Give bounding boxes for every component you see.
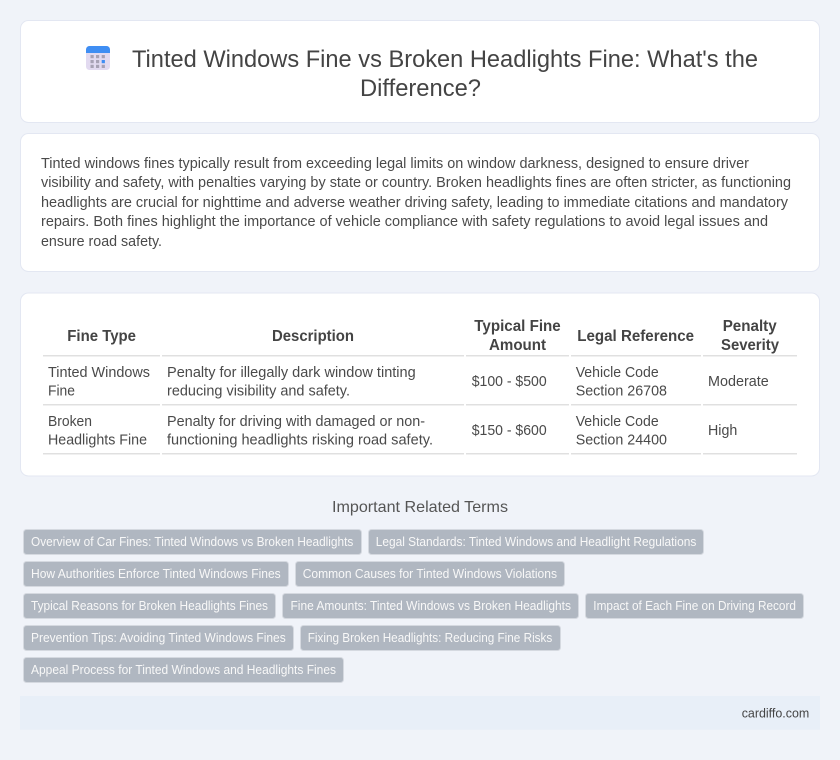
tag: typical reasons <box>24 594 276 618</box>
table row: tinted windows fine: Penalty for illegally dark window tinting <box>167 365 416 381</box>
icon: calendar <box>86 46 110 70</box>
tag: appeal process <box>24 658 344 682</box>
tag: common causes <box>296 562 564 586</box>
tag: legal standards: Legal Standards: Tinted Windows and Headlight Regulations <box>376 534 696 549</box>
tag: fixing headlights <box>300 626 560 650</box>
table header row: Severity <box>721 337 779 354</box>
table header row: Penalty <box>723 318 777 335</box>
text block: summary <box>41 156 791 250</box>
panel: summary paragraph <box>20 134 820 272</box>
table row: broken headlights fine: High <box>708 423 737 439</box>
table header row: Amount <box>489 337 547 354</box>
tag: fine amounts <box>282 594 578 618</box>
table header row: Typical Fine <box>474 318 561 335</box>
tag: overview: Overview of Car Fines: Tinted Windows vs Broken Headlights <box>31 534 353 549</box>
table row: tinted windows fine: Section 26708 <box>576 384 667 400</box>
table header row <box>43 318 797 356</box>
tag: fixing headlights: Fixing Broken Headlights: Reducing Fine Risks <box>308 630 552 645</box>
heading: important related terms: Important Related Terms <box>332 499 508 516</box>
table row: tinted windows fine: reducing visibility and safety. <box>167 384 350 400</box>
table header row: Legal Reference <box>577 328 694 345</box>
tag: enforcement <box>24 562 288 586</box>
header panel <box>20 20 820 122</box>
title: Difference? <box>360 75 481 102</box>
tag: prevention <box>24 626 294 650</box>
table row: broken headlights fine <box>43 414 797 454</box>
table row: broken headlights fine: Vehicle Code <box>576 414 659 430</box>
text block: summary: repairs. Both fines highlight the importance of vehicle compliance with safety regulations to avoid legal issues and <box>41 214 768 230</box>
table row: broken headlights fine: Headlights Fine <box>48 432 147 448</box>
tag: typical reasons: Typical Reasons for Broken Headlights Fines <box>31 598 268 613</box>
text block: summary: visibility and safety, with penalties varying by state or country. Broken headlights fines are often stricter, as functioning <box>41 175 791 191</box>
text block: summary: ensure road safety. <box>41 234 162 250</box>
table row: broken headlights fine: Penalty for driving with damaged or non- <box>167 414 425 430</box>
tag: driving record <box>586 594 804 618</box>
tag: driving record: Impact of Each Fine on Driving Record <box>593 598 796 613</box>
table header row: Fine Type <box>67 328 136 345</box>
table row: broken headlights fine: Broken <box>48 414 92 430</box>
panel: comparison table <box>20 293 820 476</box>
table row: tinted windows fine: Tinted Windows <box>48 365 150 381</box>
related terms tags <box>24 530 804 682</box>
table row: broken headlights fine: functioning headlights risking road safety. <box>167 432 433 448</box>
table row: broken headlights fine: $150 - $600 <box>472 423 547 439</box>
table header row: Description <box>272 328 354 345</box>
table row: tinted windows fine: Vehicle Code <box>576 365 659 381</box>
tag: legal standards <box>368 530 704 554</box>
table row: tinted windows fine: $100 - $500 <box>472 374 547 390</box>
table row: tinted windows fine <box>43 365 797 406</box>
table row: broken headlights fine: Section 24400 <box>576 432 667 448</box>
tag: overview <box>24 530 362 554</box>
table row: tinted windows fine: Fine <box>48 384 75 400</box>
footer source text: cardiffo.com <box>742 705 809 720</box>
footer <box>20 696 820 730</box>
tag: fine amounts: Fine Amounts: Tinted Windows vs Broken Headlights <box>290 598 571 613</box>
tag: prevention: Prevention Tips: Avoiding Tinted Windows Fines <box>31 630 286 645</box>
text block: summary: headlights are crucial for nighttime and adverse weather driving safety, leading to immediate citations and mandatory <box>41 195 789 211</box>
tag: enforcement: How Authorities Enforce Tinted Windows Fines <box>31 566 281 581</box>
tag: common causes: Common Causes for Tinted Windows Violations <box>303 566 557 581</box>
text block: summary: Tinted windows fines typically result from exceeding legal limits on window darkness, designed to ensure driver <box>41 156 749 172</box>
title <box>132 46 758 102</box>
tag: appeal process: Appeal Process for Tinted Windows and Headlights Fines <box>31 662 336 677</box>
table row: tinted windows fine: Moderate <box>708 374 769 390</box>
title: Tinted Windows Fine vs Broken Headlights Fine: What's the <box>132 46 758 73</box>
